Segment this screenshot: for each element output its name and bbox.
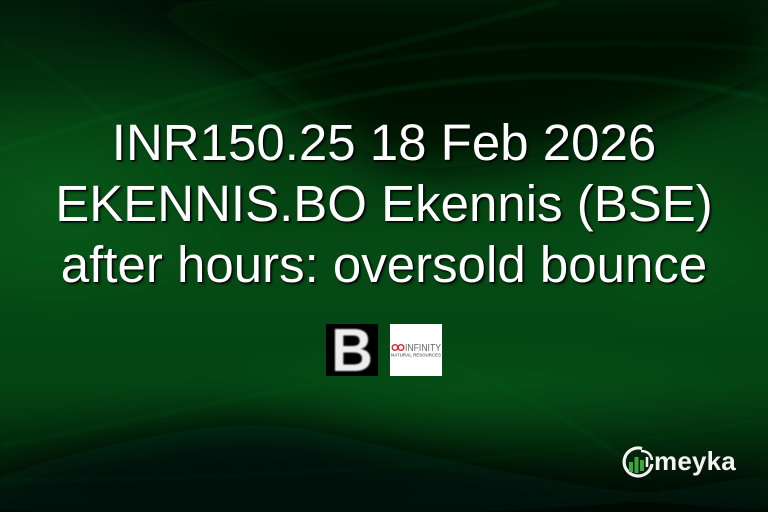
brand: meyka logo: [622, 446, 736, 478]
logo: Infinity Natural Resources tile: NATURAL RESOURCES: [391, 352, 441, 358]
title: EKENNIS.BO Ekennis (BSE): [55, 175, 713, 232]
title: INR150.25 18 Feb 2026: [112, 114, 656, 171]
wordmark: meyka: [654, 446, 736, 476]
dark bottom band: [0, 426, 768, 512]
dark top band: [60, 0, 768, 168]
title: after hours: oversold bounce: [61, 236, 707, 293]
logo: Infinity Natural Resources tile: [390, 324, 442, 376]
title: [55, 114, 713, 293]
icon: meyka chart ring: [622, 446, 654, 478]
